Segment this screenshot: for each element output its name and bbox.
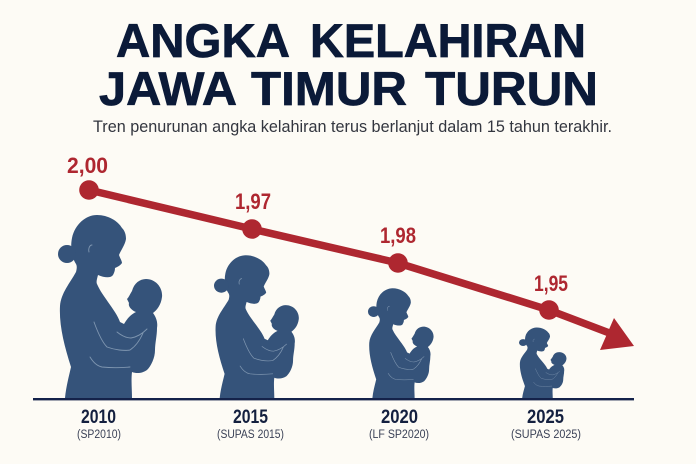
- year labels: 2010: [81, 407, 116, 428]
- value labels: 1,98: [380, 223, 416, 248]
- value labels: 1,97: [235, 189, 271, 214]
- year labels: 2025: [527, 407, 564, 428]
- year labels: [81, 407, 564, 428]
- subtitle: Tren penurunan angka kelahiran terus berlanjut dalam 15 tahun terakhir.: [93, 118, 612, 136]
- value labels: [67, 153, 568, 296]
- title: TURUN: [425, 63, 598, 116]
- source labels: (SUPAS 2025): [511, 429, 581, 441]
- trend line with arrow: [79, 180, 634, 350]
- figure: mother and baby 2015: [214, 255, 299, 398]
- figure: mother and baby 2020: [368, 288, 434, 398]
- year labels: 2015: [233, 407, 268, 428]
- figure: mother and baby 2010: [58, 215, 162, 398]
- value labels: 1,95: [534, 271, 568, 296]
- title: KELAHIRAN: [310, 15, 586, 68]
- year labels: 2020: [381, 407, 418, 428]
- source labels: (LF SP2020): [369, 429, 429, 441]
- source labels: (SP2010): [77, 429, 121, 441]
- source labels: [77, 429, 581, 441]
- baseline axis: [33, 398, 634, 400]
- title: JAWA: [99, 63, 237, 116]
- title: TIMUR: [251, 63, 407, 116]
- figure: mother and baby 2025: [519, 328, 566, 398]
- title: ANGKA: [116, 15, 290, 68]
- source labels: (SUPAS 2015): [217, 429, 284, 441]
- title: [99, 15, 598, 116]
- value labels: 2,00: [67, 153, 108, 178]
